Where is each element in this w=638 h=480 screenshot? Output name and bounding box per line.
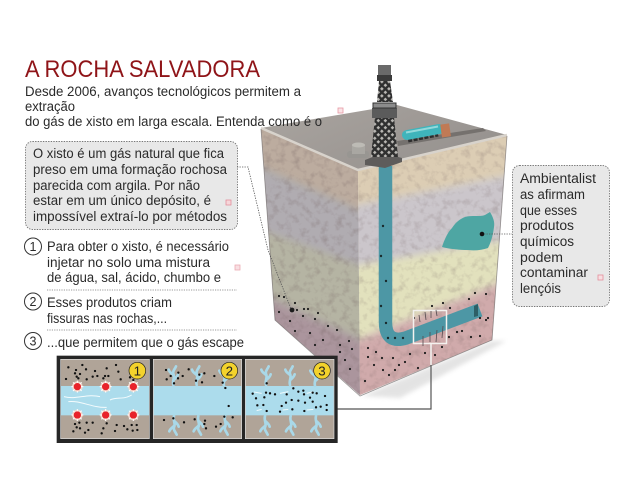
gas dots in left rock [278, 295, 353, 370]
number badge 3: 3 [318, 363, 326, 378]
pipe opening [474, 304, 478, 317]
panel: definition callout [26, 142, 238, 230]
panel: fracking stages inset [57, 356, 338, 443]
intro text: extração [25, 99, 75, 114]
arrow: dotted leader from cavern to environmental callout [480, 232, 512, 236]
panel: rock block diagram [260, 65, 508, 399]
number badge 2: 2 [226, 363, 233, 378]
panel: environmental callout: que esses [520, 203, 577, 218]
step 1 [24, 238, 240, 285]
tanker truck [406, 123, 451, 140]
panel: definition callout: estar em um único depósito, é [33, 193, 211, 208]
detail frame on pipe [414, 310, 446, 344]
panel: environmental callout: lençóis [520, 281, 561, 296]
drilling site road [397, 128, 486, 146]
arrow: dotted leader from definition callout to rock [237, 167, 291, 309]
step 3: ...que permitem que o gás escape [47, 335, 244, 350]
stage 2 panel [153, 359, 242, 439]
block shadow [362, 341, 506, 398]
intro text [25, 84, 322, 129]
panel: definition callout: parecida com argila. Por não [33, 178, 200, 193]
block dark edges [261, 129, 507, 396]
panel: environmental callout: Ambientalist [520, 171, 596, 186]
drilling derrick [365, 65, 402, 168]
panel: definition callout: impossível extraí-lo por métodos [33, 209, 227, 224]
marker: intro expand icon [338, 108, 343, 113]
step 2: 2 [30, 295, 37, 309]
number badge 2 [221, 362, 238, 379]
gas cavern [442, 212, 494, 250]
step 1: Para obter o xisto, é necessário [47, 239, 229, 254]
gas dots in pipe [380, 225, 404, 339]
panel: environmental callout: produtos [520, 218, 574, 233]
arrow: connector from detail frame to inset [337, 344, 431, 409]
intro text: Desde 2006, avanços tecnológicos permitem a [25, 84, 301, 99]
number badge 3 [314, 362, 330, 379]
intro text: do gás de xisto em larga escala. Entenda como é o [25, 114, 322, 129]
step 1: de água, sal, ácido, chumbo e [47, 270, 221, 285]
block light edges [261, 128, 507, 170]
panel: environmental callout [512, 166, 610, 306]
fractures in detail frame [419, 310, 443, 346]
stage 3 panel [245, 359, 334, 439]
number badge 1: 1 [134, 363, 141, 378]
step 2 [24, 293, 172, 326]
number badge 1 [129, 362, 146, 379]
step 1: injetar no solo uma mistura [47, 255, 210, 270]
stage 1 panel [61, 359, 149, 439]
left rock face [261, 130, 360, 395]
well pipe [386, 166, 480, 339]
storage tank [347, 142, 369, 158]
panel: environmental callout: as afirmam [520, 187, 585, 202]
right rock face [358, 136, 507, 395]
panel: environmental callout: contaminar [520, 265, 588, 280]
step 2: fissuras nas rochas,... [47, 311, 167, 326]
panel: definition callout: preso em uma formação rochosa [33, 162, 227, 177]
title: A ROCHA SALVADORA [25, 56, 260, 83]
panel: environmental callout: químicos [520, 234, 574, 249]
step 3: 3 [30, 334, 37, 348]
top face of block [261, 105, 507, 170]
panel: environmental callout: podem [520, 250, 563, 265]
step 2: Esses produtos criam [47, 295, 172, 310]
panel: definition callout: O xisto é um gás natural que fica [33, 146, 224, 161]
gas dots in right rock [364, 292, 489, 382]
step 1: 1 [30, 240, 37, 254]
